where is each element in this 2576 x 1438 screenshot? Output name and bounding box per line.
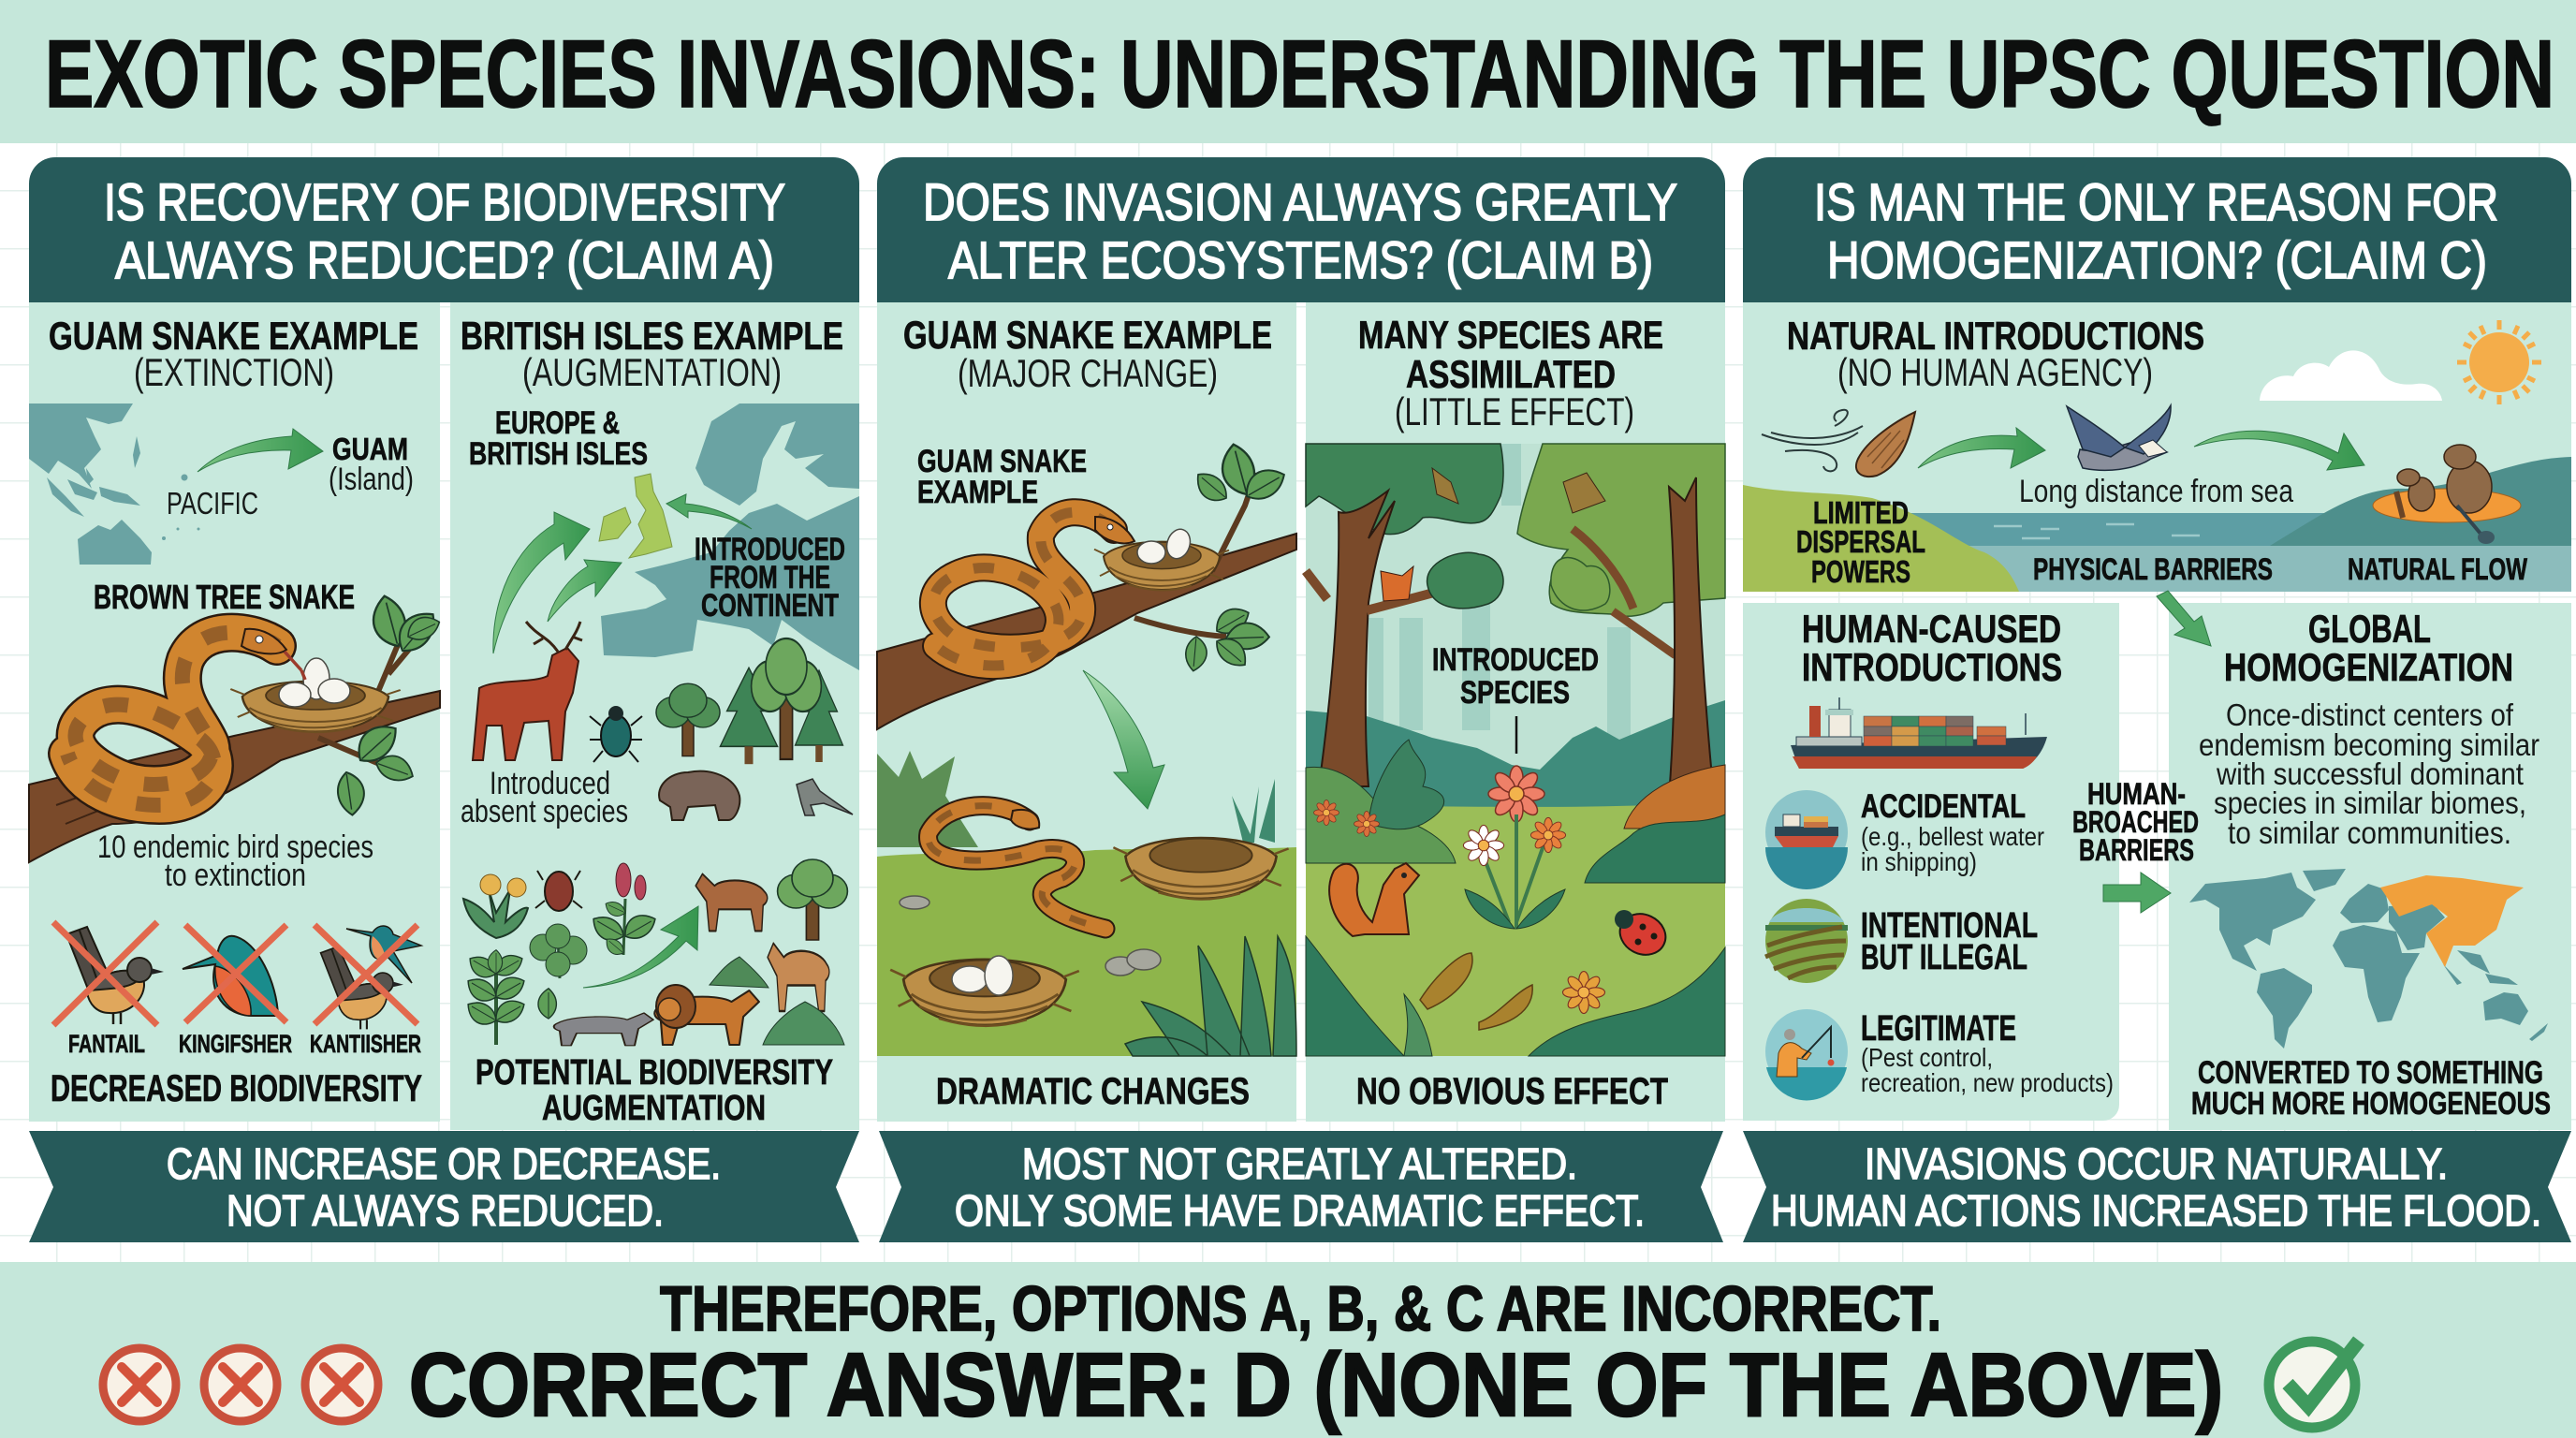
arrow: human to global — [2103, 873, 2171, 913]
sub-panel: many species assimilated — [1306, 302, 1725, 1122]
ribbon: claim A verdict: NOT ALWAYS REDUCED. — [227, 1186, 664, 1235]
map: Europe — [601, 404, 859, 670]
map labels: FROM THE — [710, 560, 830, 595]
heading: HUMAN-CAUSED — [1802, 607, 2061, 651]
sub-heading: GUAM SNAKE EXAMPLE — [903, 313, 1272, 357]
map labels: EUROPE & — [495, 405, 620, 441]
Guam labels: (Island) — [329, 462, 414, 497]
item: intentional but illegal: INTENTIONAL — [1861, 906, 2038, 946]
ribbon: claim B verdict — [879, 1131, 1723, 1242]
label: introduced species: SPECIES — [1460, 675, 1570, 711]
icon: cross C — [305, 1348, 378, 1421]
arrows to the British Isles — [493, 494, 752, 653]
description: with successful dominant — [2216, 756, 2524, 791]
icon: ladybug — [1613, 906, 1673, 962]
illustration: snake on branch with nest — [877, 441, 1296, 729]
sub-heading: MANY SPECIES ARE — [1358, 313, 1663, 357]
description: Once-distinct centers of — [2226, 697, 2514, 732]
Guam labels — [167, 432, 414, 521]
illustration: forest scene — [1306, 444, 1725, 1056]
sub-heading — [1358, 313, 1663, 433]
illustration: introduced species — [473, 622, 853, 820]
header: claim B: DOES INVASION ALWAYS GREATLY — [923, 172, 1677, 231]
icon: sun — [2457, 320, 2541, 404]
scene labels: PHYSICAL BARRIERS — [2033, 552, 2273, 586]
title band — [0, 0, 2576, 143]
heading: HOMOGENIZATION — [2224, 645, 2513, 689]
heading: INTRODUCTIONS — [1802, 645, 2062, 689]
icon: fantail crossed out: FANTAIL — [68, 1030, 145, 1058]
caption: converted — [2191, 1055, 2551, 1122]
panel: claim B — [877, 157, 1725, 1242]
ribbon: claim C verdict — [1743, 1131, 2571, 1242]
panel: claim A — [29, 157, 859, 1242]
arrow: down to the ground — [1083, 670, 1164, 809]
sub-heading: (LITTLE EFFECT) — [1395, 389, 1634, 433]
label: Guam snake example: EXAMPLE — [917, 475, 1038, 510]
scene labels: POWERS — [1811, 554, 1910, 589]
correct answer: CORRECT ANSWER: D (NONE OF THE ABOVE) — [409, 1335, 2223, 1435]
sub-heading — [461, 314, 843, 394]
sub-panel: global homogenization — [2169, 603, 2571, 1130]
caption: introduced absent species: absent species — [461, 794, 628, 829]
label: introduced species — [1432, 642, 1599, 754]
header: claim A — [29, 157, 859, 302]
conclusion: decreased biodiversity: DECREASED BIODIVERSITY — [51, 1068, 422, 1109]
icon: cross A — [103, 1348, 176, 1421]
arrow: bird to raft — [2194, 431, 2364, 470]
map labels: CONTINENT — [701, 588, 839, 624]
icon: flying bird — [2067, 405, 2171, 470]
icon: animals on raft — [2373, 445, 2521, 544]
arrow: natural to global — [2157, 591, 2211, 646]
header: claim A: IS RECOVERY OF BIODIVERSITY — [104, 172, 785, 231]
label: Guam snake example: GUAM SNAKE — [917, 444, 1087, 479]
icon: container ship — [1791, 697, 2047, 769]
heading — [2224, 607, 2513, 689]
illustration: augmented species mix — [462, 859, 847, 1046]
icon: kingfisher crossed out: KINGIFSHER — [179, 1030, 292, 1058]
item: intentional but illegal: BUT ILLEGAL — [1861, 938, 2027, 977]
item: legitimate: (Pest control, — [1861, 1043, 1993, 1072]
description: to similar communities. — [2228, 815, 2511, 850]
sub-panel: Guam snake extinction — [29, 302, 443, 1122]
icon: third bird crossed out: KANTIISHER — [310, 1030, 421, 1058]
ribbon: claim B verdict: ONLY SOME HAVE DRAMATIC EFFECT. — [955, 1186, 1645, 1235]
caption: introduced absent species: Introduced — [490, 766, 610, 801]
sub-heading — [903, 313, 1272, 395]
header: claim C: HOMOGENIZATION? (CLAIM C) — [1827, 230, 2487, 289]
conclusion: potential augmentation: AUGMENTATION — [542, 1089, 766, 1128]
icon: wind and seed — [1762, 410, 1915, 477]
label: Guam snake example — [917, 444, 1087, 510]
scene labels: LIMITED — [1813, 495, 1909, 530]
scene labels: DISPERSAL — [1796, 524, 1925, 559]
ribbon: claim B verdict: MOST NOT GREATLY ALTERED. — [1022, 1139, 1577, 1188]
icon: kingfisher crossed out — [179, 925, 292, 1058]
item: legitimate — [1765, 1009, 2114, 1100]
heading: natural introductions — [1787, 314, 2204, 394]
label: introduced species: INTRODUCED — [1432, 642, 1599, 678]
map labels: BRITISH ISLES — [469, 436, 648, 472]
caption: introduced absent species — [461, 766, 628, 829]
sub-panel: Guam snake major change — [877, 302, 1296, 1122]
sub-heading: (MAJOR CHANGE) — [958, 351, 1218, 395]
sub-heading — [49, 314, 418, 394]
panel: claim C — [1743, 157, 2571, 1242]
label: brown tree snake: BROWN TREE SNAKE — [94, 578, 355, 616]
world map — [2189, 869, 2548, 1049]
scene labels: Long distance from sea — [2019, 474, 2293, 509]
conclusion: potential augmentation: POTENTIAL BIODIVERSITY — [476, 1053, 833, 1093]
map: Pacific — [29, 404, 200, 565]
conclusion: no obvious effect: NO OBVIOUS EFFECT — [1356, 1071, 1668, 1112]
arrow: seed to bird — [1918, 428, 2045, 468]
illustration: snake on branch with nest — [29, 593, 443, 862]
header: claim B — [877, 157, 1725, 302]
conclusion: potential augmentation — [476, 1053, 833, 1128]
item: accidental: (e.g., bellest water — [1861, 822, 2044, 851]
heading: natural introductions: NATURAL INTRODUCTIONS — [1787, 314, 2204, 358]
label: human-broached barriers: BROACHED — [2072, 805, 2199, 839]
item: accidental: in shipping) — [1861, 847, 1977, 876]
Guam labels: GUAM — [332, 432, 408, 466]
icon: fantail crossed out — [53, 922, 164, 1058]
icon: third bird crossed out — [310, 925, 421, 1058]
sub-heading: (AUGMENTATION) — [522, 350, 782, 394]
heading: natural introductions: (NO HUMAN AGENCY) — [1837, 350, 2153, 394]
map labels: INTRODUCED — [695, 532, 845, 567]
header: claim A: ALWAYS REDUCED? (CLAIM A) — [115, 230, 774, 289]
sub-heading: GUAM SNAKE EXAMPLE — [49, 314, 418, 358]
header: claim C — [1743, 157, 2571, 302]
description — [2199, 697, 2539, 850]
caption: endemic birds: 10 endemic bird species — [97, 829, 373, 865]
item: legitimate: LEGITIMATE — [1861, 1009, 2016, 1049]
label: human-broached barriers: BARRIERS — [2079, 833, 2194, 867]
caption: endemic birds — [97, 829, 373, 893]
item: accidental — [1765, 788, 2044, 889]
bottom answer band — [0, 1262, 2576, 1438]
sub-panel: British Isles augmentation — [450, 302, 859, 1130]
map: British Isles — [599, 474, 672, 558]
illustration: landscape — [1743, 457, 2571, 592]
statement: options incorrect: THEREFORE, OPTIONS A, B, & C ARE INCORRECT. — [660, 1273, 1941, 1344]
label: human-broached barriers: HUMAN- — [2087, 777, 2186, 811]
header: claim B: ALTER ECOSYSTEMS? (CLAIM B) — [948, 230, 1653, 289]
ribbon: claim A verdict: CAN INCREASE OR DECREASE. — [167, 1139, 721, 1188]
item: legitimate: recreation, new products) — [1861, 1068, 2114, 1097]
sub-heading: ASSIMILATED — [1406, 352, 1616, 396]
description: species in similar biomes, — [2214, 785, 2526, 820]
item: accidental: ACCIDENTAL — [1861, 788, 2026, 825]
heading — [1802, 607, 2062, 689]
Guam labels: PACIFIC — [167, 486, 258, 521]
heading: GLOBAL — [2308, 607, 2431, 651]
scene labels — [1796, 474, 2528, 589]
sub-heading: BRITISH ISLES EXAMPLE — [461, 314, 843, 358]
ribbon: claim C verdict: INVASIONS OCCUR NATURALLY. — [1865, 1139, 2448, 1188]
icon: green check — [2269, 1341, 2359, 1428]
sub-panel: human-caused introductions — [1743, 603, 2119, 1121]
item: intentional but illegal — [1765, 899, 2038, 983]
icon: squirrel — [1329, 863, 1419, 936]
illustration: ground scene with nests — [877, 751, 1296, 1056]
ribbon: claim A verdict — [29, 1131, 859, 1242]
sub-heading: (EXTINCTION) — [134, 350, 334, 394]
description: endemism becoming similar — [2199, 727, 2539, 762]
icon: cloud — [2260, 350, 2442, 401]
icon: cross B — [204, 1348, 277, 1421]
arrow to Guam — [198, 429, 323, 472]
caption: endemic birds: to extinction — [165, 858, 306, 893]
label: human-broached barriers — [2072, 777, 2199, 867]
sub-panel: natural introductions — [1743, 302, 2571, 592]
conclusion: dramatic changes: DRAMATIC CHANGES — [936, 1071, 1250, 1112]
map labels — [469, 405, 845, 624]
